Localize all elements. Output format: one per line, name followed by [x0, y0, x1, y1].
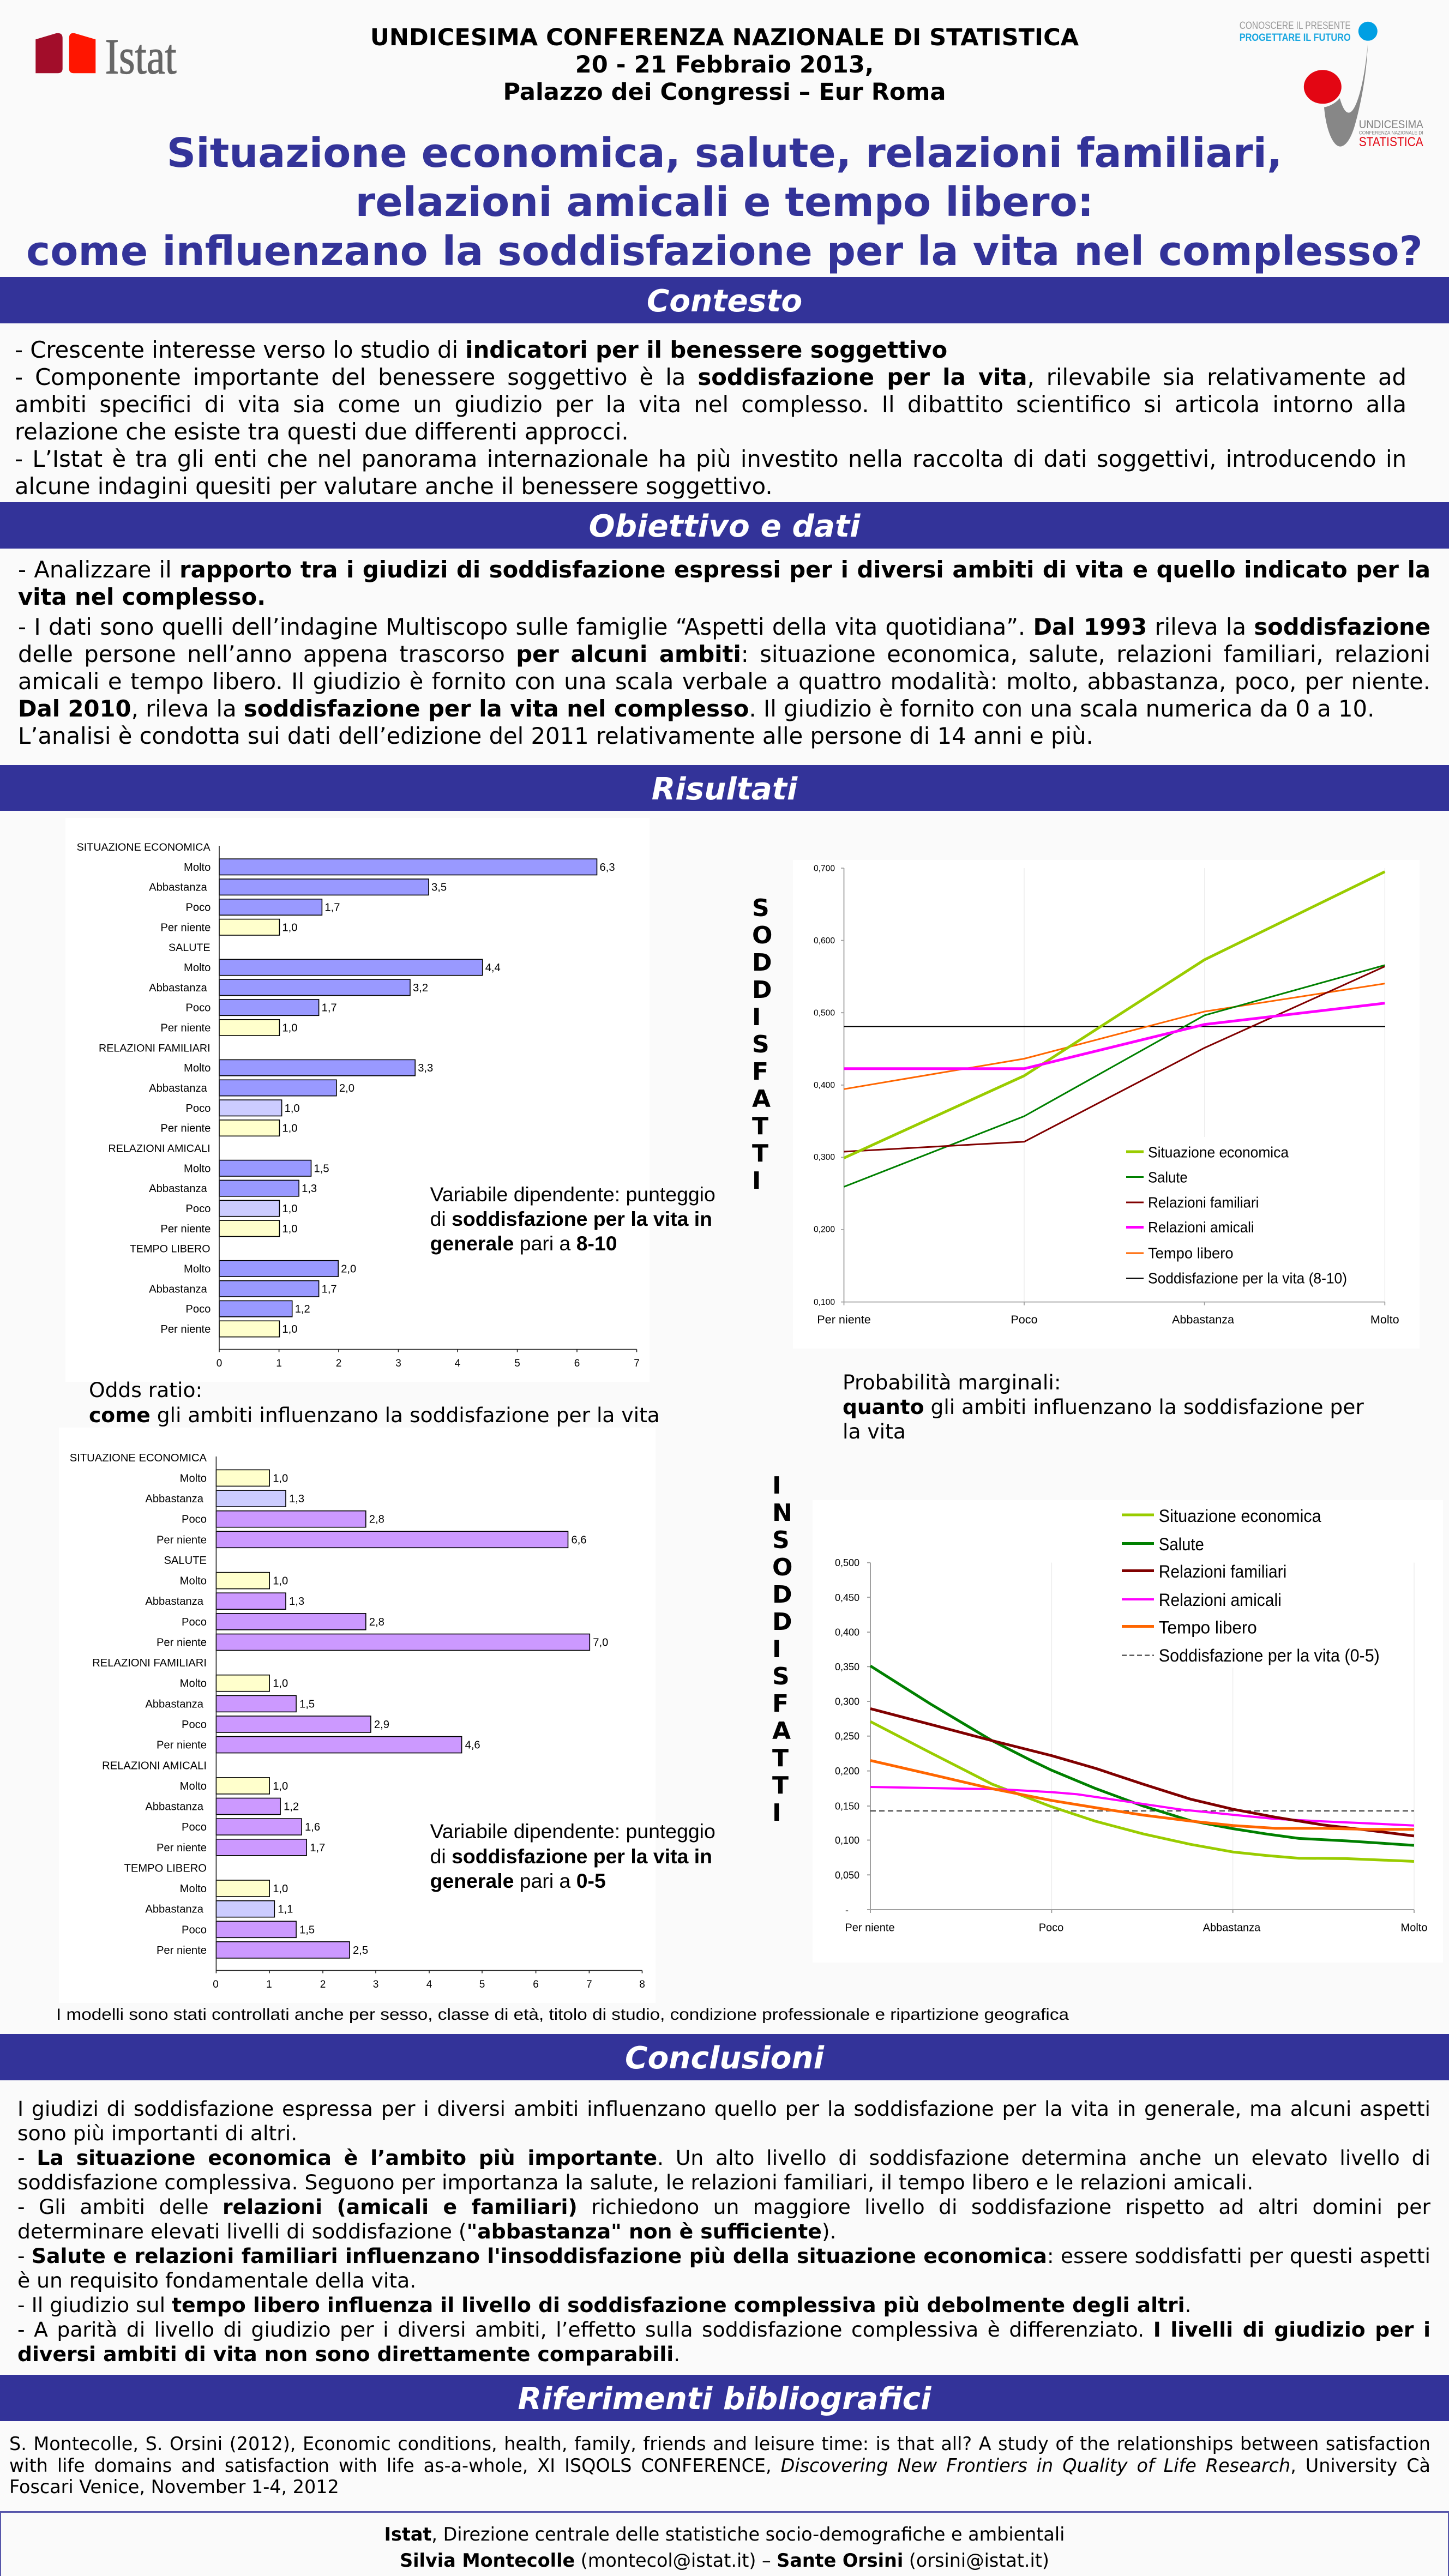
title [26, 129, 1423, 275]
bars: tempo libero: TEMPO LIBERO [130, 1243, 211, 1255]
bars: tempo libero [130, 1243, 356, 1337]
axes: 4 [455, 1358, 461, 1369]
bars: tempo libero: 1,2 [295, 1303, 310, 1315]
bars: relazioni amicali: Poco [182, 1821, 207, 1833]
axes: 1 [276, 1358, 282, 1369]
text block: Conclusioni: - A parità di livello di giudizio per i diversi ambiti, l’effetto sulla soddisfazione complessiva è differenziato. I livelli di giudizio per i [17, 2318, 1430, 2342]
axes: Abbastanza [1203, 1922, 1261, 1934]
caption: probabilità marginali [843, 1370, 1364, 1443]
vertical label: SODDISFATTI: O [752, 922, 772, 949]
footer: contatti [0, 2511, 1449, 2576]
bars: tempo libero: 1,1 [278, 1904, 293, 1916]
bars: relazioni amicali: Per niente [160, 1223, 211, 1235]
bars: situazione economica: 1,7 [324, 902, 340, 914]
bars: situazione economica: 6,6 [572, 1534, 587, 1546]
axes: 2 [336, 1358, 341, 1369]
bars: situazione economica: Poco [185, 902, 211, 914]
bars: relazioni familiari: 1,0 [273, 1678, 288, 1690]
bars: salute: 1,3 [289, 1596, 304, 1608]
bars: salute: 2,8 [369, 1616, 384, 1628]
vertical label: INSODDISFATTI: S [772, 1526, 790, 1554]
bars: tempo libero: Molto [180, 1883, 207, 1895]
bars: relazioni amicali: 1,0 [273, 1780, 288, 1792]
text block: Contesto: - L’Istat è tra gli enti che nel panorama internazionale ha più investito nella raccolta di dati soggettivi, introducendo in [15, 446, 1406, 472]
bars: tempo libero: 1,0 [282, 1323, 297, 1335]
text block: riferimenti: with life domains and satisfaction with life as-a-whole, XI ISQOLS CONFERENCE, Discovering New Frontiers in Quality of Life Research, University Cà [9, 2455, 1430, 2476]
note: variabile dipendente 8-10 [430, 1183, 716, 1255]
bars: salute: 1,0 [282, 1022, 297, 1034]
axes: Poco [1039, 1922, 1063, 1934]
bars: tempo libero: 1,7 [322, 1283, 337, 1295]
heading: Conclusioni: Conclusioni [625, 2041, 824, 2075]
bars: salute: SALUTE [169, 942, 211, 954]
axes: 6 [533, 1979, 539, 1990]
bars: situazione economica: 1,0 [282, 922, 297, 934]
bars: tempo libero: 1,5 [299, 1924, 315, 1936]
vertical label: SODDISFATTI: D [752, 976, 772, 1004]
bars: relazioni amicali: Per niente [157, 1842, 207, 1854]
axes: 0,250 [835, 1731, 859, 1742]
legend: Soddisfazione per la vita (0-5) [1159, 1646, 1380, 1665]
bars: salute: SALUTE [164, 1555, 207, 1567]
conference header: Palazzo dei Congressi – Eur Roma [503, 79, 946, 106]
bars: salute: 4,4 [485, 962, 501, 974]
bars: tempo libero: Poco [182, 1924, 207, 1936]
bars: relazioni amicali [109, 1143, 329, 1237]
vertical label: SODDISFATTI: S [752, 894, 769, 922]
bars: salute: 1,0 [273, 1575, 288, 1587]
caption: probabilità marginali: quanto gli ambiti influenzano la soddisfazione per [843, 1395, 1364, 1419]
bars: relazioni amicali: Abbastanza [149, 1183, 208, 1195]
text block: Conclusioni: - La situazione economica è l’ambito più importante. Un alto livello di soddisfazione determina anche un elevato livello di [17, 2146, 1430, 2170]
conference header: 20 - 21 Febbraio 2013, [575, 51, 874, 79]
bars: salute: Molto [184, 962, 211, 974]
bars: tempo libero: Per niente [160, 1323, 211, 1335]
bars: salute: 1,7 [322, 1002, 337, 1014]
line chart: probabilità soddisfatti [793, 860, 1420, 1349]
legend: Relazioni amicali [1159, 1590, 1282, 1610]
title: Situazione economica, salute, relazioni familiari, [167, 129, 1282, 177]
heading: Riferimenti bibliografici [0, 2375, 1449, 2421]
text block: Conclusioni: sono più importanti di altri. [17, 2121, 297, 2145]
axes: 0,400 [835, 1627, 859, 1638]
axes [217, 846, 640, 1369]
bars: relazioni amicali: Poco [185, 1203, 211, 1215]
axes: 0,200 [835, 1766, 859, 1777]
axes: 7 [586, 1979, 592, 1990]
text block: Conclusioni [17, 2097, 1430, 2366]
bars: situazione economica: SITUAZIONE ECONOMICA [70, 1452, 207, 1464]
bars: relazioni familiari: 1,5 [299, 1698, 315, 1710]
text block: Obiettivo e dati: amicali e tempo libero. Il giudizio è fornito con una scala verbale a quattro modalità: molto, abbastanza, poco, per niente. [18, 668, 1430, 695]
vertical label: INSODDISFATTI: I [772, 1635, 781, 1663]
bars: tempo libero [124, 1862, 368, 1958]
text block: Contesto [15, 336, 1406, 499]
note: variabile dipendente 8-10: generale pari a 8-10 [430, 1232, 617, 1255]
caption: odds ratio [89, 1378, 660, 1427]
vertical label: INSODDISFATTI: I [772, 1472, 781, 1500]
legend: Relazioni amicali [1148, 1219, 1254, 1236]
vertical label: SODDISFATTI: T [752, 1112, 768, 1140]
axes: Per niente [817, 1313, 871, 1326]
bars: salute: Poco [182, 1616, 207, 1628]
note: variabile dipendente 0-5: generale pari a 0-5 [430, 1869, 606, 1892]
bars: situazione economica: Abbastanza [149, 882, 208, 894]
text block: riferimenti [9, 2433, 1430, 2497]
heading: Risultati: Risultati [652, 772, 797, 807]
note: variabile dipendente 8-10: di soddisfazione per la vita in [430, 1207, 712, 1230]
vertical label: INSODDISFATTI: D [772, 1581, 792, 1609]
axes: Per niente [845, 1922, 895, 1934]
vertical label: INSODDISFATTI: N [772, 1499, 792, 1527]
vertical label: SODDISFATTI: F [752, 1058, 768, 1086]
axes: 0,100 [814, 1298, 835, 1307]
bars: situazione economica: 3,5 [431, 882, 447, 894]
bars: tempo libero: 2,0 [341, 1263, 356, 1275]
note: variabile dipendente 0-5 [430, 1820, 716, 1892]
footer: contatti: Istat, Direzione centrale delle statistiche socio-demografiche e ambientali [384, 2524, 1065, 2545]
axes [835, 1557, 1427, 1934]
text block: Obiettivo e dati: delle persone nell’anno appena trascorso per alcuni ambiti: situazione economica, salute, relazioni familiari, relazioni [18, 641, 1430, 667]
text block: Conclusioni: è un requisito fondamentale della vita. [17, 2268, 416, 2292]
bars: salute: Molto [180, 1575, 207, 1587]
bars: relazioni amicali [102, 1760, 325, 1856]
legend [1126, 1144, 1347, 1287]
bars: relazioni amicali: Abbastanza [145, 1801, 204, 1813]
text block: Conclusioni: - Salute e relazioni familiari influenzano l'insoddisfazione più della situazione economica: essere soddisfatti per questi aspetti [17, 2244, 1430, 2268]
axes: 5 [514, 1358, 520, 1369]
logo: conferenza statistica: CONOSCERE IL PRESENTE [1240, 20, 1351, 32]
bars: relazioni familiari: Per niente [157, 1740, 207, 1752]
bars: situazione economica: 2,8 [369, 1514, 384, 1526]
bars: salute: Per niente [160, 1022, 211, 1034]
axes: 1 [266, 1979, 272, 1990]
text block: Contesto: - Crescente interesse verso lo studio di indicatori per il benessere soggettivo [15, 336, 947, 363]
bar chart: odds ratio insoddisfatti [59, 1428, 656, 2003]
axes: 7 [634, 1358, 640, 1369]
axes: 0,600 [814, 936, 835, 946]
text block: Contesto: alcune indagini quesiti per valutare anche il benessere soggettivo. [15, 473, 773, 499]
bars: relazioni familiari: 4,6 [465, 1740, 480, 1752]
text block: Obiettivo e dati: L’analisi è condotta sui dati dell’edizione del 2011 relativamente alle persone di 14 anni e più. [18, 723, 1093, 749]
logo: Istat [35, 30, 177, 76]
bars: tempo libero: Molto [184, 1263, 211, 1275]
axes [213, 1456, 645, 1990]
heading: Riferimenti bibliografici: Riferimenti bibliografici [518, 2381, 931, 2417]
series lines [870, 1666, 1414, 1861]
axes: 6 [574, 1358, 580, 1369]
legend: Relazioni familiari [1159, 1562, 1286, 1581]
conference header: UNDICESIMA CONFERENZA NAZIONALE DI STATISTICA [370, 24, 1079, 51]
bars: situazione economica: SITUAZIONE ECONOMICA [77, 841, 211, 853]
vertical label: SODDISFATTI: A [752, 1085, 771, 1113]
note: variabile dipendente 0-5: di soddisfazione per la vita in [430, 1844, 712, 1867]
axes: 0,400 [814, 1081, 835, 1090]
bars: salute [145, 1555, 608, 1650]
bars: situazione economica [77, 841, 615, 935]
legend: Soddisfazione per la vita (8-10) [1148, 1269, 1347, 1287]
axes: 0,300 [814, 1153, 835, 1162]
axes: 0 [213, 1979, 219, 1990]
footnote: controlli del modello: I modelli sono stati controllati anche per sesso, classe di età, titolo di studio, condizione professionale e ripartizione geografica [56, 2006, 1069, 2024]
heading: Risultati [0, 765, 1449, 811]
bars: situazione economica: 1,3 [289, 1493, 304, 1505]
axes: 0,500 [835, 1557, 859, 1568]
vertical label: SODDISFATTI: T [752, 1140, 768, 1167]
legend: Tempo libero [1148, 1244, 1234, 1262]
text block: Obiettivo e dati: - Analizzare il rapporto tra i giudizi di soddisfazione espressi per i diversi ambiti di vita e quello indicato per la [18, 556, 1430, 583]
axes [814, 864, 1399, 1326]
bars: relazioni amicali: 1,3 [302, 1183, 317, 1195]
legend: Salute [1159, 1534, 1204, 1554]
text block: riferimenti: S. Montecolle, S. Orsini (2012), Economic conditions, health, family, friends and leisure time: is that all? A study of the relationships between satisfaction [9, 2433, 1430, 2454]
bars: tempo libero: 1,0 [273, 1883, 288, 1895]
axes: 0,300 [835, 1696, 859, 1707]
bar chart: odds ratio soddisfatti [65, 818, 650, 1382]
vertical label: INSODDISFATTI: A [772, 1717, 791, 1745]
text block: Obiettivo e dati: - I dati sono quelli dell’indagine Multiscopo sulle famiglie “Aspetti della vita quotidiana”. Dal 1993 rileva la soddisfazione [18, 613, 1430, 640]
bars: situazione economica: Per niente [157, 1534, 207, 1546]
text block: Conclusioni: - Il giudizio sul tempo libero influenza il livello di soddisfazione complessiva più debolmente degli altri. [17, 2293, 1192, 2317]
vertical label: SODDISFATTI [752, 894, 772, 1195]
bars: salute: Abbastanza [149, 982, 208, 994]
bars: situazione economica: Molto [184, 862, 211, 874]
axes: 0,200 [814, 1225, 835, 1235]
axes: 3 [395, 1358, 401, 1369]
axes: 0,050 [835, 1870, 859, 1881]
vertical label: INSODDISFATTI: O [772, 1554, 792, 1581]
bars: situazione economica: Abbastanza [145, 1493, 204, 1505]
axes: 0,700 [814, 864, 835, 874]
axes: 0,500 [814, 1009, 835, 1018]
bars: tempo libero: Abbastanza [149, 1283, 208, 1295]
axes: 4 [426, 1979, 432, 1990]
bars: situazione economica: Per niente [160, 922, 211, 934]
bars: relazioni amicali: Molto [184, 1163, 211, 1175]
text block: Conclusioni: I giudizi di soddisfazione espressa per i diversi ambiti influenzano quello per la soddisfazione per la vita in generale, ma alcuni aspetti [17, 2097, 1430, 2121]
legend [1122, 1506, 1380, 1665]
text block: Obiettivo e dati: Dal 2010, rileva la soddisfazione per la vita nel complesso. Il giudizio è fornito con una scala numerica da 0 a 10. [18, 695, 1374, 722]
heading: Contesto [0, 277, 1449, 323]
heading: Obiettivo e dati [0, 502, 1449, 549]
text block: Conclusioni: - Gli ambiti delle relazioni (amicali e familiari) richiedono un maggiore livello di soddisfazione rispetto ad altri domini per [17, 2195, 1430, 2219]
text block: Obiettivo e dati [18, 556, 1430, 749]
bars: tempo libero: Per niente [157, 1945, 207, 1957]
vertical label: INSODDISFATTI: I [772, 1799, 781, 1827]
bars: relazioni familiari: 1,0 [285, 1103, 300, 1115]
axes: 2 [320, 1979, 326, 1990]
axes: 0,350 [835, 1662, 859, 1672]
axes: Abbastanza [1172, 1313, 1235, 1326]
bars: relazioni amicali: 1,7 [310, 1842, 325, 1854]
bars: situazione economica: 6,3 [600, 862, 615, 874]
bars: relazioni familiari: Poco [185, 1103, 211, 1115]
vertical label: INSODDISFATTI: T [772, 1772, 789, 1799]
text block: Contesto: - Componente importante del benessere soggettivo è la soddisfazione per la vita, rilevabile sia relativamente ad [15, 364, 1406, 390]
axes: - [845, 1905, 849, 1916]
bars: situazione economica [70, 1452, 587, 1548]
bars: salute: 3,2 [413, 982, 428, 994]
bars: relazioni amicali: Molto [180, 1780, 207, 1792]
caption: probabilità marginali: Probabilità marginali: [843, 1370, 1061, 1394]
logo: conferenza statistica: PROGETTARE IL FUTURO [1240, 32, 1351, 44]
footer: contatti: Silvia Montecolle (montecol@istat.it) – Sante Orsini (orsini@istat.it) [400, 2550, 1049, 2571]
text block: Contesto: ambiti specifici di vita sia come un giudizio per la vita nel complesso. Il dibattito scientifico si articola intorno alla [15, 391, 1406, 418]
bars: relazioni familiari: 3,3 [418, 1062, 433, 1074]
text block: Obiettivo e dati: vita nel complesso. [18, 583, 266, 610]
vertical label: SODDISFATTI: D [752, 949, 772, 977]
axes: Molto [1370, 1313, 1399, 1326]
note: variabile dipendente 0-5: Variabile dipendente: punteggio [430, 1820, 716, 1843]
title: relazioni amicali e tempo libero: [356, 178, 1093, 226]
axes: 0,450 [835, 1592, 859, 1603]
axes: Poco [1011, 1313, 1038, 1326]
bars: salute: Poco [185, 1002, 211, 1014]
bars: relazioni amicali: 1,6 [305, 1821, 320, 1833]
bars: relazioni familiari: Per niente [160, 1123, 211, 1135]
bars: relazioni amicali: 1,5 [314, 1163, 329, 1175]
logo: conferenza statistica [1240, 20, 1423, 149]
bars: relazioni amicali: RELAZIONI AMICALI [109, 1143, 211, 1155]
bars: tempo libero: 2,5 [353, 1945, 368, 1957]
bars: relazioni familiari: Poco [182, 1719, 207, 1731]
bars: relazioni amicali: 1,0 [282, 1203, 297, 1215]
caption: odds ratio: Odds ratio: [89, 1378, 202, 1402]
bars: tempo libero: Poco [185, 1303, 211, 1315]
text block: Conclusioni: diversi ambiti di vita non sono direttamente comparabili. [17, 2342, 680, 2366]
bars: tempo libero: Abbastanza [145, 1904, 204, 1916]
vertical label: INSODDISFATTI: T [772, 1744, 789, 1772]
bars: situazione economica: Molto [180, 1472, 207, 1484]
bars: relazioni amicali: 1,0 [282, 1223, 297, 1235]
bars: relazioni amicali: RELAZIONI AMICALI [102, 1760, 207, 1772]
bars: situazione economica: 1,0 [273, 1472, 288, 1484]
bars: relazioni familiari [99, 1042, 433, 1136]
vertical label: INSODDISFATTI: D [772, 1608, 792, 1636]
bars: relazioni familiari: 2,0 [339, 1082, 354, 1094]
text block: riferimenti: Foscari Venice, November 1-4, 2012 [9, 2476, 339, 2497]
axes: 0,100 [835, 1835, 859, 1846]
logo: conferenza statistica: UNDICESIMA [1359, 118, 1423, 131]
heading: Obiettivo e dati: Obiettivo e dati [589, 509, 860, 544]
bars: relazioni familiari: Abbastanza [145, 1698, 204, 1710]
bars: salute: Abbastanza [145, 1596, 204, 1608]
bars: situazione economica: Poco [182, 1514, 207, 1526]
text block: Conclusioni: soddisfazione complessiva. Seguono per importanza la salute, le relazioni familiari, il tempo libero e le relazioni amicali. [17, 2170, 1253, 2194]
text block: Conclusioni: determinare elevati livelli di soddisfazione ("abbastanza" non è sufficiente). [17, 2219, 837, 2243]
axes: Molto [1401, 1922, 1427, 1934]
bars: salute [149, 942, 501, 1036]
bars: relazioni amicali: 1,2 [284, 1801, 299, 1813]
series lines [844, 872, 1385, 1187]
vertical label: INSODDISFATTI: S [772, 1663, 790, 1690]
vertical label: INSODDISFATTI: F [772, 1690, 789, 1718]
legend: Relazioni familiari [1148, 1194, 1259, 1211]
vertical label: SODDISFATTI: S [752, 1031, 769, 1058]
vertical label: SODDISFATTI: I [752, 1003, 761, 1031]
bars: relazioni familiari [92, 1657, 480, 1753]
bars: relazioni familiari: Abbastanza [149, 1082, 208, 1094]
axes: 5 [479, 1979, 485, 1990]
axes: 0 [217, 1358, 222, 1369]
bars: salute: 7,0 [593, 1637, 608, 1649]
caption: odds ratio: come gli ambiti influenzano la soddisfazione per la vita [89, 1403, 660, 1427]
text block: Contesto: relazione che esiste tra questi due differenti approcci. [15, 418, 629, 445]
bars: relazioni familiari: Molto [180, 1678, 207, 1690]
bars: relazioni familiari: 2,9 [374, 1719, 389, 1731]
vertical label: INSODDISFATTI [772, 1472, 792, 1827]
bars: tempo libero: TEMPO LIBERO [124, 1862, 207, 1874]
bars: salute: Per niente [157, 1637, 207, 1649]
conference header [370, 24, 1079, 106]
note: variabile dipendente 8-10: Variabile dipendente: punteggio [430, 1183, 716, 1206]
heading: Conclusioni [0, 2034, 1449, 2080]
bars: relazioni familiari: 1,0 [282, 1123, 297, 1135]
axes: 3 [373, 1979, 378, 1990]
legend: Situazione economica [1148, 1144, 1289, 1160]
line chart: probabilità insoddisfatti [813, 1500, 1443, 1963]
legend: Tempo libero [1159, 1617, 1257, 1637]
bars: relazioni familiari: Molto [184, 1062, 211, 1074]
bars: relazioni familiari: RELAZIONI FAMILIARI [99, 1042, 211, 1054]
heading: Contesto: Contesto [647, 284, 802, 319]
legend: Salute [1148, 1169, 1188, 1185]
caption: probabilità marginali: la vita [843, 1419, 906, 1443]
legend: Situazione economica [1159, 1506, 1321, 1526]
axes: 8 [639, 1979, 645, 1990]
title: come influenzano la soddisfazione per la vita nel complesso? [26, 227, 1423, 275]
bars: relazioni familiari: RELAZIONI FAMILIARI [92, 1657, 207, 1669]
vertical label: SODDISFATTI: I [752, 1167, 761, 1195]
axes: 0,150 [835, 1801, 859, 1811]
